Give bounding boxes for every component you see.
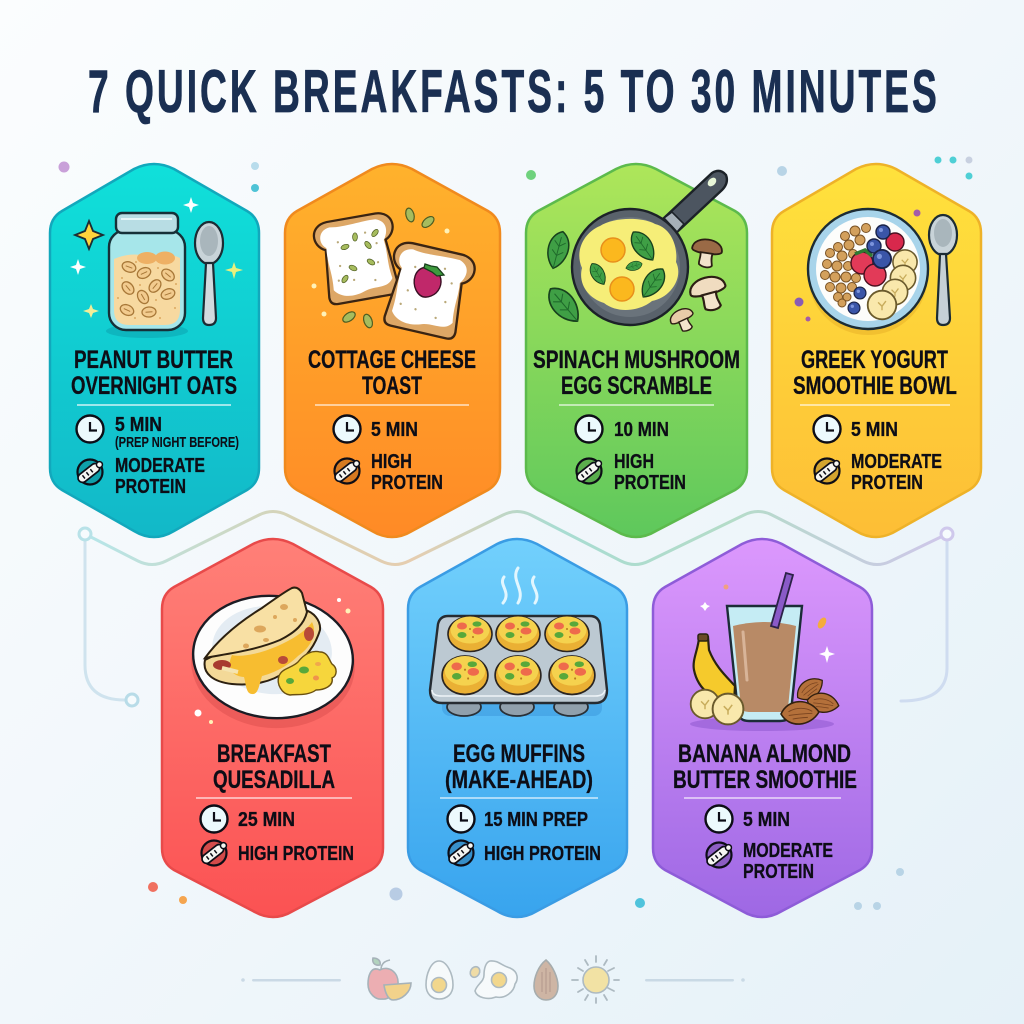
protein xyxy=(575,451,686,494)
protein: PROTEIN xyxy=(115,476,186,498)
time: 5 MIN xyxy=(851,419,898,441)
protein: MODERATE xyxy=(851,451,942,473)
heading: EGG SCRAMBLE xyxy=(561,372,712,400)
time: 15 MIN PREP xyxy=(484,809,588,831)
icon: steam xyxy=(502,568,537,603)
heading xyxy=(793,346,957,400)
protein xyxy=(813,451,942,494)
heading: TOAST xyxy=(362,372,422,400)
protein xyxy=(333,451,443,494)
time: (PREP NIGHT BEFORE) xyxy=(115,434,239,451)
heading xyxy=(213,740,335,794)
time xyxy=(706,806,790,832)
icon: smoothie glass with banana and almonds xyxy=(690,573,840,731)
heading: (MAKE-AHEAD) xyxy=(445,766,593,794)
time: 25 MIN xyxy=(238,809,295,831)
panel: spinach mushroom egg scramble xyxy=(526,164,747,537)
protein: HIGH PROTEIN xyxy=(484,843,601,865)
icon: apple xyxy=(368,958,411,1000)
icon: two toasts with cottage cheese xyxy=(312,207,477,341)
icon: sparkles xyxy=(70,197,243,318)
protein: PROTEIN xyxy=(743,861,814,883)
time xyxy=(814,416,898,442)
protein: HIGH PROTEIN xyxy=(238,843,354,865)
time: 5 MIN xyxy=(743,809,790,831)
heading: QUESADILLA xyxy=(213,766,335,794)
protein: HIGH xyxy=(614,451,654,473)
time: 5 MIN xyxy=(371,419,418,441)
time: 5 MIN xyxy=(115,414,162,436)
icon: jar of oats with spoon xyxy=(106,213,223,338)
heading: EGG MUFFINS xyxy=(453,740,585,768)
protein: HIGH xyxy=(371,451,412,473)
footer icon row xyxy=(241,956,745,1003)
icon: almond xyxy=(534,960,558,1000)
heading: PEANUT BUTTER xyxy=(74,346,233,374)
icon: yogurt bowl with granola, berries, banana xyxy=(794,209,957,335)
title: 7 QUICK BREAKFASTS: 5 TO 30 MINUTES xyxy=(88,58,937,125)
decorative dots xyxy=(58,156,972,910)
heading: BUTTER SMOOTHIE xyxy=(673,766,857,794)
icon: boiled egg xyxy=(426,961,453,999)
icon: muffin tray xyxy=(430,616,607,716)
icon: frying pan with egg scramble xyxy=(542,171,731,336)
time xyxy=(200,806,295,832)
time: 10 MIN xyxy=(614,419,669,441)
heading xyxy=(533,346,740,400)
panel: greek yogurt smoothie bowl xyxy=(772,164,981,537)
heading: COTTAGE CHEESE xyxy=(308,346,476,374)
time xyxy=(448,806,588,832)
heading: BREAKFAST xyxy=(217,740,331,768)
protein: PROTEIN xyxy=(371,472,443,494)
panel: cottage cheese toast xyxy=(285,164,500,537)
protein xyxy=(200,840,354,866)
heading: GREEK YOGURT xyxy=(801,346,948,374)
time xyxy=(576,416,669,442)
icon: fried egg xyxy=(468,961,517,998)
protein: PROTEIN xyxy=(851,472,923,494)
protein: MODERATE xyxy=(115,455,205,477)
panel: egg muffins xyxy=(408,539,627,917)
panel: peanut butter overnight oats xyxy=(50,164,259,537)
heading: SMOOTHIE BOWL xyxy=(793,372,957,400)
panel: breakfast quesadilla xyxy=(162,539,383,917)
heading xyxy=(673,740,857,794)
time xyxy=(334,416,418,442)
protein: PROTEIN xyxy=(614,472,686,494)
heading: SPINACH MUSHROOM xyxy=(533,346,740,374)
heading xyxy=(71,346,237,400)
time xyxy=(76,414,239,451)
icon: sun xyxy=(572,956,619,1003)
protein xyxy=(705,840,833,883)
heading xyxy=(445,740,593,794)
heading: OVERNIGHT OATS xyxy=(71,372,237,400)
icon: scrambled eggs xyxy=(278,651,336,695)
heading xyxy=(308,346,476,400)
connector line linking the cards xyxy=(79,512,953,706)
protein xyxy=(447,840,601,866)
heading: BANANA ALMOND xyxy=(678,740,851,768)
icon: quesadilla on a plate xyxy=(186,588,360,735)
protein: MODERATE xyxy=(743,840,833,862)
protein xyxy=(76,455,205,498)
panel: banana almond butter smoothie xyxy=(653,539,872,917)
